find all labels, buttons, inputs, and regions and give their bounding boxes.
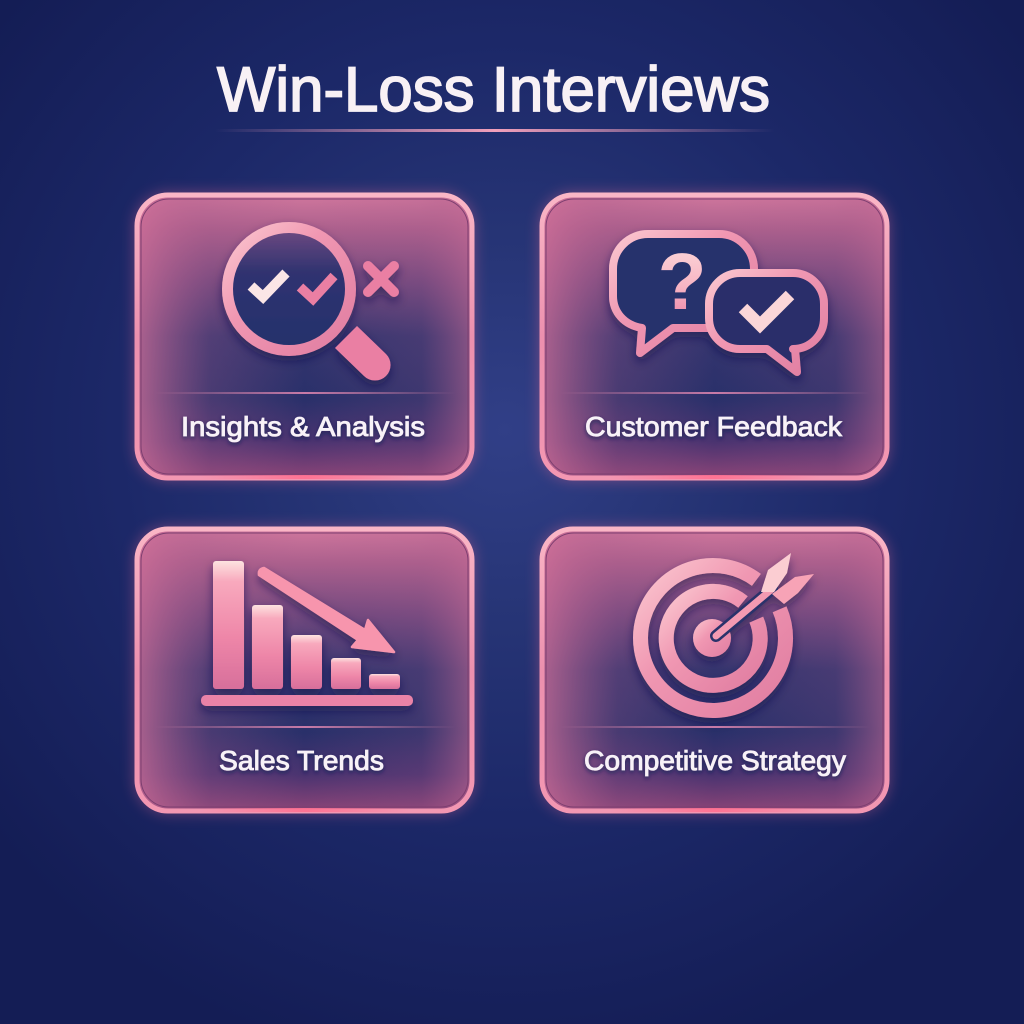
divider [155, 726, 455, 728]
label: Customer Feedback [585, 411, 843, 442]
panel: insights and analysis [134, 192, 475, 481]
divider [560, 726, 870, 728]
icon: declining bar chart [201, 561, 413, 706]
divider [560, 392, 870, 394]
icon: speech bubbles [613, 234, 824, 372]
panel: customer feedback [539, 192, 890, 481]
question bubble [613, 234, 754, 353]
arrow [259, 568, 394, 652]
arrow fletching [761, 553, 791, 592]
check mark [743, 295, 790, 325]
divider [155, 392, 455, 394]
label: Sales Trends [219, 745, 384, 776]
icon: target and arrow [641, 553, 814, 710]
panel: sales trends [134, 526, 475, 814]
check bubble [709, 273, 824, 372]
panel: competitive strategy [539, 526, 890, 814]
title underline [215, 129, 775, 132]
label: Competitive Strategy [584, 745, 846, 776]
label: Insights & Analysis [181, 411, 425, 442]
title: Win-Loss Interviews [217, 55, 770, 125]
question mark: ? [658, 237, 706, 326]
icon: magnifying glass [228, 228, 394, 381]
